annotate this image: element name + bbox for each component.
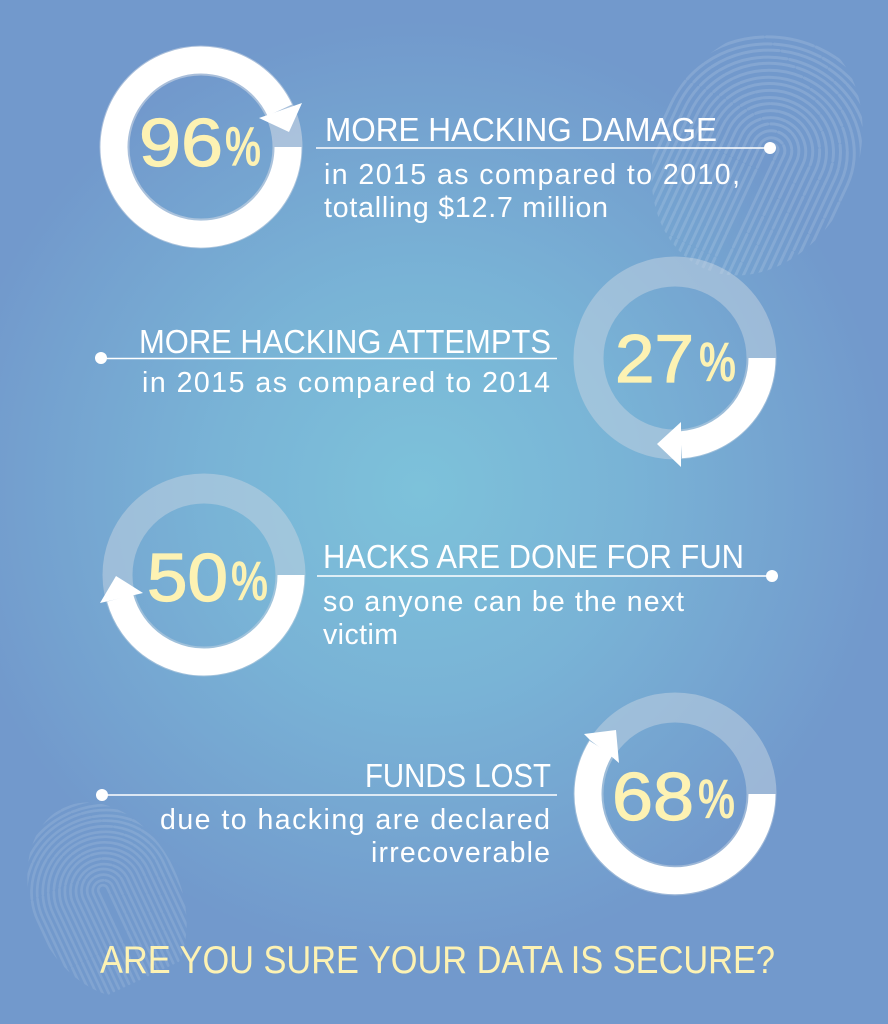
closing question: ARE YOU SURE YOUR DATA IS SECURE? [100, 939, 775, 982]
body text [323, 586, 684, 651]
donut: 50% [100, 488, 291, 662]
icon: fingerprint top right [652, 36, 862, 276]
body text: due to hacking are declared [160, 804, 550, 836]
body text [160, 804, 550, 869]
panel: 68 percent [96, 708, 762, 881]
number: 27% [615, 321, 736, 397]
body text: victim [323, 619, 398, 651]
leader line with dot [95, 352, 557, 364]
leader line with dot [96, 789, 557, 801]
heading: more hacking attempts: MORE HACKING ATTEMPTS [139, 323, 551, 360]
number: 96% [139, 105, 261, 181]
number: 68%: % [698, 767, 735, 830]
body text: so anyone can be the next [323, 586, 684, 618]
heading: hacks are done for fun: HACKS ARE DONE FOR FUN [323, 538, 744, 575]
number: 96%: % [225, 114, 261, 178]
number: 68% [612, 759, 735, 835]
icon: fingerprint bottom left [28, 802, 186, 994]
number: 68%: 68 [612, 759, 694, 835]
panel: 50 percent [100, 488, 778, 662]
number: 96%: 96 [139, 105, 223, 181]
body text: irrecoverable [371, 837, 550, 869]
number: 50%: 50 [147, 540, 228, 616]
donut: 96% [114, 60, 302, 234]
heading: more hacking damage: MORE HACKING DAMAGE [325, 111, 717, 148]
leader line with dot [316, 142, 776, 154]
heading: funds lost: FUNDS LOST [365, 757, 551, 794]
body text: in 2015 as compared to 2010, [324, 159, 740, 191]
number: 50%: % [231, 549, 268, 612]
body text [324, 159, 740, 224]
body text: in 2015 as compared to 2014 [142, 367, 550, 399]
donut: 68% [584, 708, 762, 881]
panel: 96 percent [114, 60, 776, 234]
number: 27%: % [699, 330, 736, 393]
donut: 27% [588, 272, 762, 467]
number: 50% [147, 540, 268, 616]
leader line with dot [317, 570, 778, 582]
body text: totalling $12.7 million [324, 192, 608, 224]
panel: 27 percent [95, 272, 762, 467]
number: 27%: 27 [615, 321, 694, 397]
